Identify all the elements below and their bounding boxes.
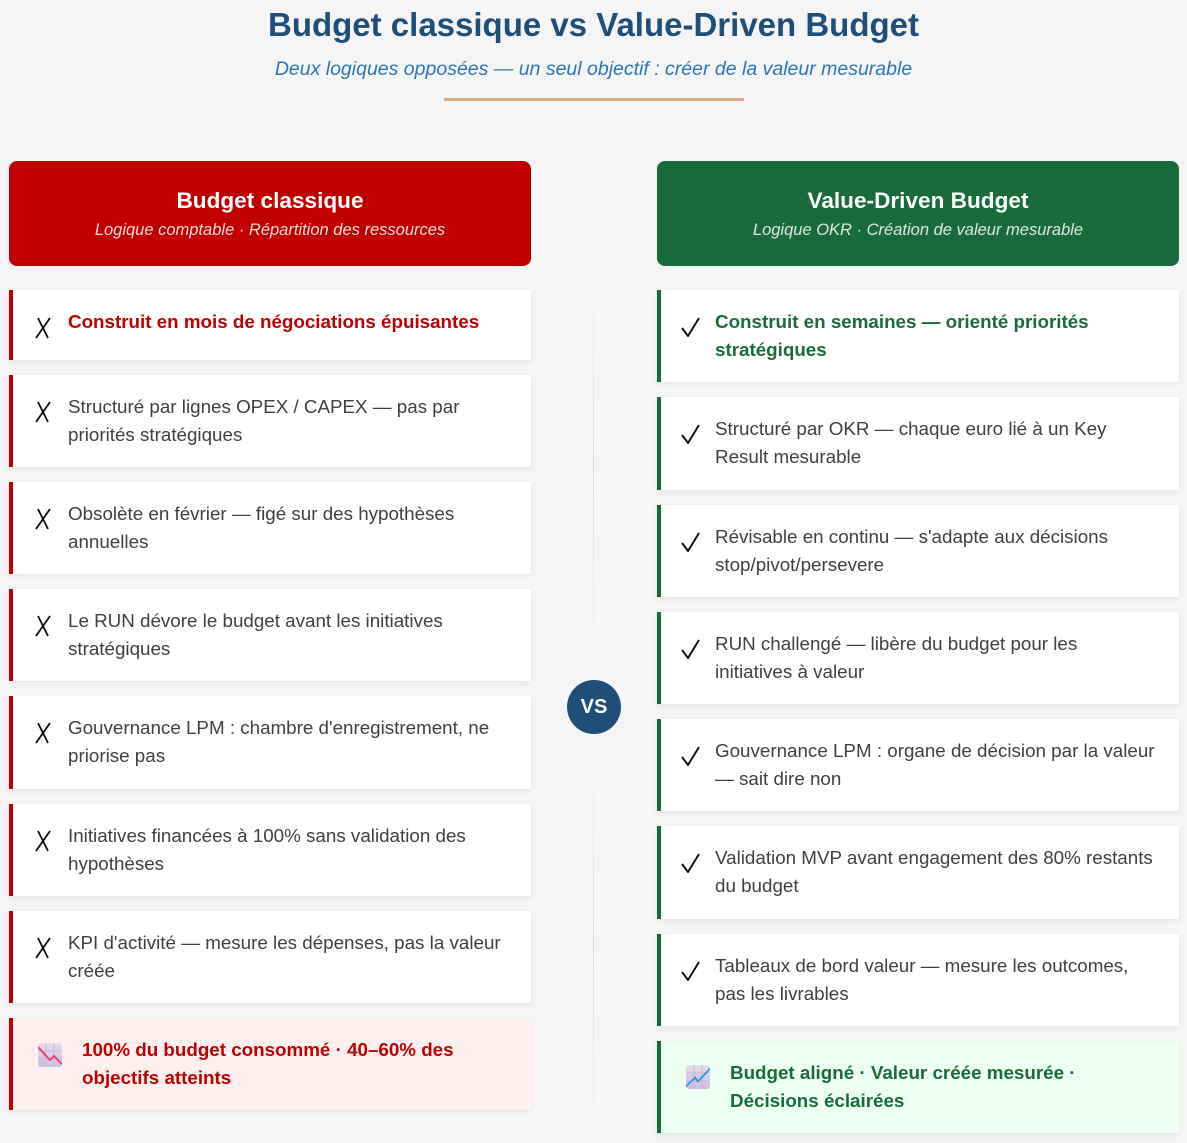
left item 4: Le RUN dévore le budget avant les initiatives bbox=[68, 610, 443, 631]
right item 1: stratégiques bbox=[715, 339, 827, 360]
right item 5: — sait dire non bbox=[715, 768, 841, 789]
left item 5: Gouvernance LPM : chambre d'enregistrement, ne bbox=[68, 717, 489, 738]
left item 3: Obsolète en février — figé sur des hypothèses bbox=[68, 503, 454, 524]
icon: cross bbox=[35, 616, 51, 636]
right item 7: Tableaux de bord valeur — mesure les outcomes, bbox=[715, 955, 1128, 976]
title: Budget classique vs Value-Driven Budget bbox=[268, 6, 919, 43]
subtitle: Deux logiques opposées — un seul objectif : créer de la valeur mesurable bbox=[275, 58, 912, 80]
icon: falling chart bbox=[38, 1043, 62, 1067]
right item 7: pas les livrables bbox=[715, 983, 849, 1004]
right item 4: RUN challengé — libère du budget pour les bbox=[715, 633, 1077, 654]
left item 2 bbox=[9, 375, 531, 467]
icon: check bbox=[681, 854, 700, 873]
title underline bbox=[444, 98, 744, 101]
vs badge: VS bbox=[581, 696, 607, 718]
left item 3 bbox=[9, 482, 531, 574]
right item 4: initiatives à valeur bbox=[715, 661, 864, 682]
panel header: value-driven budget: Value-Driven Budget bbox=[808, 188, 1028, 213]
left item 7: créée bbox=[68, 960, 115, 981]
right item 7 bbox=[657, 934, 1179, 1026]
right item 5 bbox=[657, 719, 1179, 811]
right item 1 bbox=[657, 290, 1179, 382]
icon: cross bbox=[35, 830, 51, 852]
panel header: value-driven budget: Logique OKR · Création de valeur mesurable bbox=[753, 221, 1083, 239]
panel header: budget classique: Logique comptable · Répartition des ressources bbox=[95, 221, 445, 239]
left result callout bbox=[9, 1018, 531, 1110]
icon: cross bbox=[35, 318, 51, 338]
left item 1: Construit en mois de négociations épuisantes bbox=[68, 311, 479, 332]
right item 1: Construit en semaines — orienté priorités bbox=[715, 311, 1089, 332]
divider bottom bbox=[593, 750, 594, 1143]
left item 6: Initiatives financées à 100% sans validation des bbox=[68, 825, 466, 846]
right result callout: Budget aligné · Valeur créée mesurée · bbox=[730, 1062, 1076, 1083]
panel header: budget classique: Budget classique bbox=[176, 188, 364, 213]
right result callout bbox=[657, 1041, 1179, 1133]
divider top bbox=[593, 270, 594, 665]
icon: check bbox=[681, 746, 700, 766]
left item 6: hypothèses bbox=[68, 853, 164, 874]
icon: check bbox=[681, 962, 700, 981]
icon: cross bbox=[35, 938, 51, 958]
left result callout: objectifs atteints bbox=[82, 1067, 231, 1088]
right item 2: Structuré par OKR — chaque euro lié à un Key bbox=[715, 418, 1106, 439]
right item 6: Validation MVP avant engagement des 80% restants bbox=[715, 847, 1153, 868]
panel header: budget classique bbox=[9, 161, 531, 266]
icon: cross bbox=[35, 402, 51, 422]
left result callout: 100% du budget consommé · 40–60% des bbox=[82, 1039, 454, 1060]
icon: rising chart bbox=[686, 1065, 710, 1089]
right item 6: du budget bbox=[715, 875, 799, 896]
left item 2: priorités stratégiques bbox=[68, 424, 242, 445]
icon: check bbox=[681, 640, 700, 659]
right item 3: Révisable en continu — s'adapte aux décisions bbox=[715, 526, 1108, 547]
right item 2 bbox=[657, 397, 1179, 490]
right item 3 bbox=[657, 505, 1179, 597]
left item 1 bbox=[9, 290, 531, 360]
left item 4 bbox=[9, 589, 531, 681]
left item 5 bbox=[9, 696, 531, 789]
right result callout: Décisions éclairées bbox=[730, 1090, 904, 1111]
icon: check bbox=[681, 532, 700, 552]
vs badge bbox=[567, 680, 621, 734]
right item 3: stop/pivot/persevere bbox=[715, 554, 884, 575]
left item 2: Structuré par lignes OPEX / CAPEX — pas par bbox=[68, 396, 459, 417]
left item 4: stratégiques bbox=[68, 638, 170, 659]
icon: cross bbox=[35, 508, 51, 530]
left item 7 bbox=[9, 911, 531, 1003]
right item 2: Result mesurable bbox=[715, 446, 861, 467]
icon: check bbox=[681, 424, 700, 444]
right item 5: Gouvernance LPM : organe de décision par la valeur bbox=[715, 740, 1155, 761]
right item 4 bbox=[657, 612, 1179, 704]
left item 7: KPI d'activité — mesure les dépenses, pas la valeur bbox=[68, 932, 501, 953]
left item 5: priorise pas bbox=[68, 745, 165, 766]
icon: check bbox=[681, 318, 700, 337]
panel header: value-driven budget bbox=[657, 161, 1179, 266]
left item 6 bbox=[9, 804, 531, 896]
right item 6 bbox=[657, 826, 1179, 919]
left item 3: annuelles bbox=[68, 531, 148, 552]
icon: cross bbox=[35, 722, 51, 744]
